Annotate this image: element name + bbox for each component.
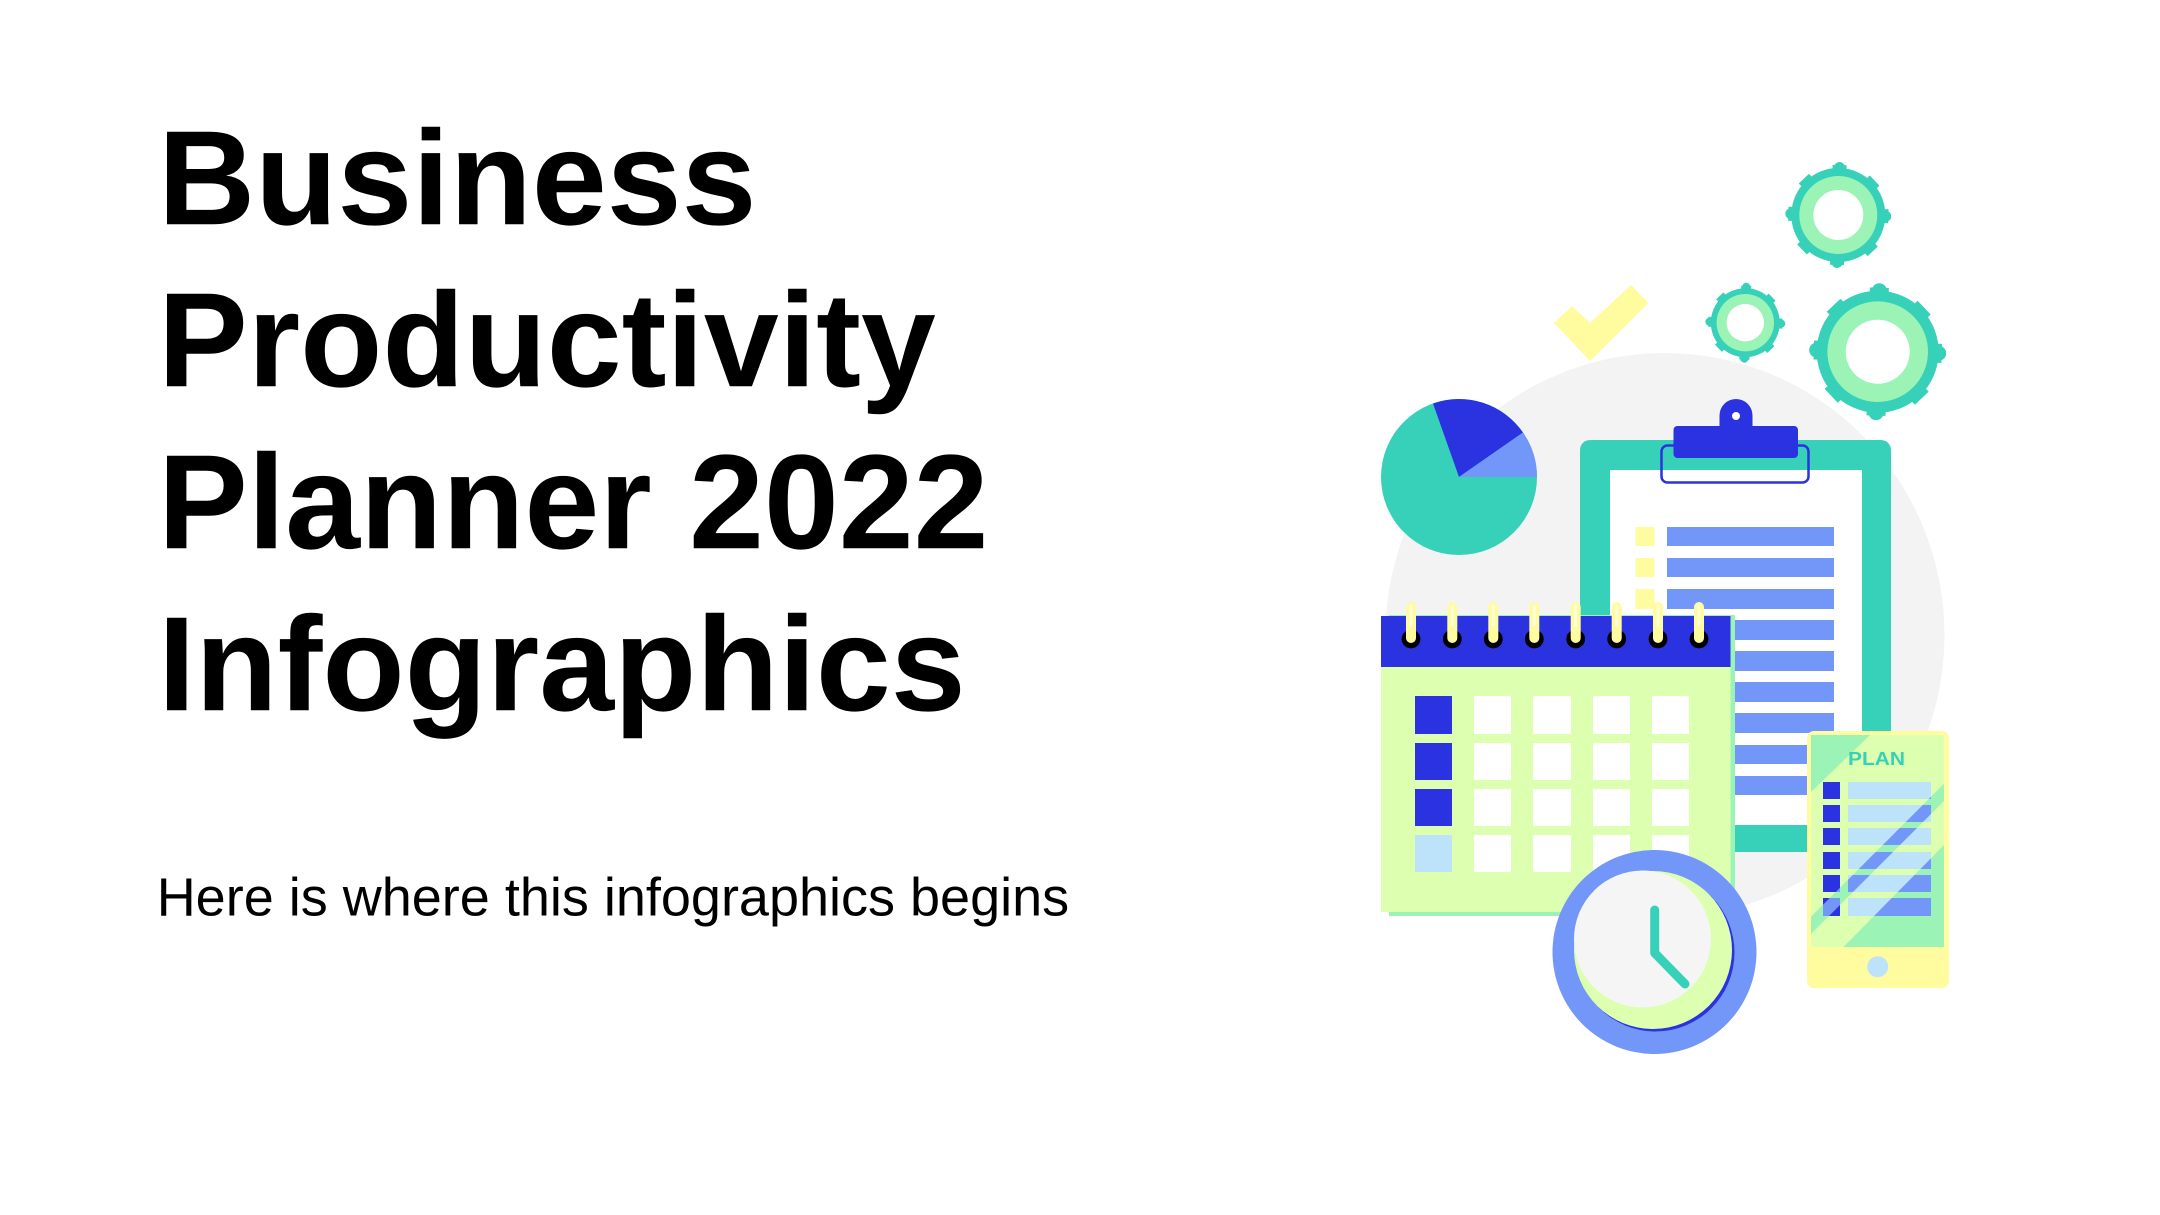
icon: check mark <box>1554 285 1648 361</box>
clipboard <box>1580 399 1891 852</box>
title: Planner 2022 <box>158 426 988 577</box>
title: Productivity <box>158 264 936 415</box>
icon: gear top <box>1787 164 1890 266</box>
calendar rings <box>1402 606 1708 648</box>
phone <box>1807 731 1949 988</box>
calendar grid <box>1415 696 1689 872</box>
phone list <box>1823 782 1931 916</box>
phone home button <box>1867 956 1888 977</box>
illustration: productivity planner <box>1381 164 1949 1054</box>
subtitle: Here is where this infographics begins <box>157 868 1069 928</box>
clock <box>1552 850 1756 1054</box>
icon: gear large <box>1812 286 1943 417</box>
checklist lines <box>1667 527 1834 795</box>
background circle <box>1386 353 1944 917</box>
clock hands <box>1655 910 1685 984</box>
pie chart <box>1381 399 1537 555</box>
clip <box>1674 399 1798 458</box>
calendar <box>1381 606 1735 916</box>
icon: gear small <box>1707 285 1783 361</box>
checklist bullets <box>1636 527 1654 609</box>
title: Infographics <box>158 588 966 739</box>
phone heading: PLAN <box>1848 749 1905 769</box>
title: Business <box>158 102 756 253</box>
title <box>158 102 988 739</box>
clip outline <box>1662 446 1808 482</box>
